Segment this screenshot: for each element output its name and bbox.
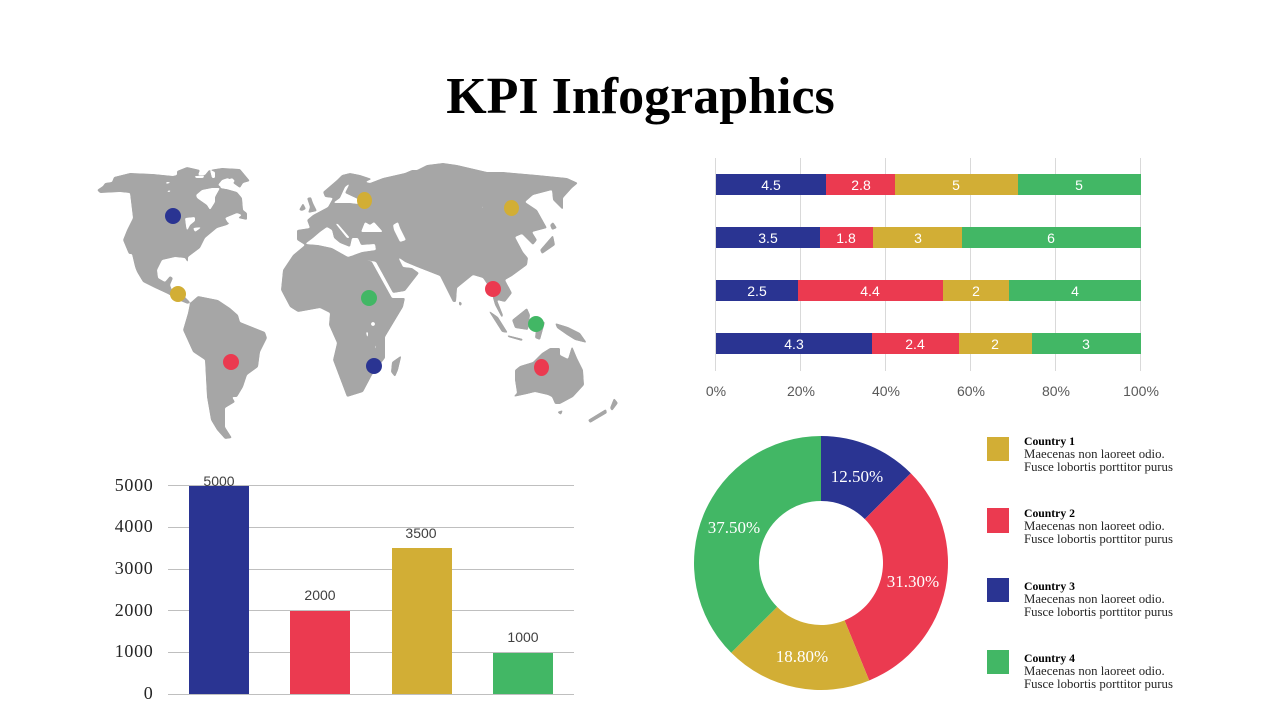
world map with markers <box>97 163 618 439</box>
legend item: Country 4 <box>987 650 1173 691</box>
marker: Siberia <box>504 200 519 216</box>
column chart <box>115 473 574 703</box>
stacked bar row 1: 4.5 <box>761 177 781 193</box>
stacked bar row 2: 3 <box>914 230 922 246</box>
donut percentage labels: 18.80% <box>776 647 828 666</box>
stacked bar row 2: 3.5 <box>758 230 778 246</box>
legend item: Country 2: Country 2 <box>1024 507 1075 520</box>
donut percentage labels <box>708 467 939 666</box>
donut segment: 37.5% <box>694 436 821 653</box>
marker: Southern Africa <box>366 358 382 374</box>
donut chart <box>694 436 948 690</box>
legend item: Country 2: Fusce lobortis porttitor purus <box>1024 532 1173 546</box>
column value labels: 1000 <box>507 629 539 645</box>
stacked bar row 3: 4.4 <box>860 283 880 299</box>
stacked bar row 1: 2.8 <box>851 177 871 193</box>
legend item: Country 1 <box>987 435 1173 474</box>
column value labels: 5000 <box>203 473 235 489</box>
percent axis labels: 0% <box>706 383 726 399</box>
marker: Central America <box>170 286 186 302</box>
legend item: Country 1: Fusce lobortis porttitor purus <box>1024 460 1173 474</box>
column: 3500 <box>392 548 452 694</box>
stacked bar row 1 <box>716 174 1141 195</box>
stacked bar row 3 <box>716 280 1141 301</box>
percent axis labels: 60% <box>957 383 985 399</box>
stacked bar row 4 <box>716 333 1141 354</box>
percent axis labels <box>706 383 1159 399</box>
column: 1000 <box>493 653 553 694</box>
column: 5000 <box>189 486 249 694</box>
marker: Australia <box>534 359 549 376</box>
stacked bar chart <box>706 158 1159 399</box>
marker: Africa <box>361 290 377 306</box>
column value labels: 2000 <box>304 587 336 603</box>
donut segment: 12.5% <box>821 436 911 519</box>
stacked bar row 3: 2 <box>972 283 980 299</box>
stacked bar row 1: 5 <box>1075 177 1083 193</box>
percent axis labels: 100% <box>1123 383 1159 399</box>
y axis labels: 3000 <box>115 558 154 578</box>
y axis labels: 5000 <box>115 475 154 495</box>
legend item: Country 1: Maecenas non laoreet odio. <box>1024 447 1165 461</box>
stacked bar row 4: 3 <box>1082 336 1090 352</box>
percent axis labels: 20% <box>787 383 815 399</box>
map land masses <box>97 163 618 439</box>
donut percentage labels: 12.50% <box>831 467 883 486</box>
legend item: Country 2: Maecenas non laoreet odio. <box>1024 519 1165 533</box>
column value labels: 3500 <box>405 525 437 541</box>
legend <box>987 435 1173 691</box>
stacked bar row 4: 4.3 <box>784 336 804 352</box>
legend item: Country 1: Country 1 <box>1024 435 1075 448</box>
title: KPI Infographics <box>446 68 835 125</box>
y axis labels: 1000 <box>115 641 154 661</box>
stacked bar row 3: 4 <box>1071 283 1079 299</box>
stacked bar row 3: 2.5 <box>747 283 767 299</box>
donut percentage labels: 37.50% <box>708 518 760 537</box>
stacked bar row 2 <box>716 227 1141 248</box>
y axis labels <box>115 475 154 703</box>
marker: Indonesia <box>528 316 544 332</box>
legend item: Country 4: Country 4 <box>1024 652 1075 665</box>
legend item: Country 2 <box>987 507 1173 546</box>
donut segment: 18.8% <box>731 607 869 690</box>
legend item: Country 4: Maecenas non laoreet odio. <box>1024 664 1165 678</box>
stacked bar row 1: 5 <box>952 177 960 193</box>
marker: Southeast Asia <box>485 281 501 297</box>
percent axis labels: 80% <box>1042 383 1070 399</box>
legend item: Country 4: Fusce lobortis porttitor purus <box>1024 677 1173 691</box>
percent axis labels: 40% <box>872 383 900 399</box>
column value labels <box>203 473 539 645</box>
stacked bar row 4: 2.4 <box>905 336 925 352</box>
donut segment: 31.3% <box>845 473 948 680</box>
stacked bar row 2: 1.8 <box>836 230 856 246</box>
y axis labels: 2000 <box>115 600 154 620</box>
y axis labels: 0 <box>144 683 154 703</box>
legend item: Country 3: Maecenas non laoreet odio. <box>1024 592 1165 606</box>
y axis labels: 4000 <box>115 516 154 536</box>
stacked bar row 2: 6 <box>1047 230 1055 246</box>
legend item: Country 3 <box>987 578 1173 619</box>
marker: North America <box>165 208 181 224</box>
stacked bar row 4: 2 <box>991 336 999 352</box>
marker: South America <box>223 354 239 370</box>
column: 2000 <box>290 611 350 694</box>
legend item: Country 3: Fusce lobortis porttitor purus <box>1024 605 1173 619</box>
donut percentage labels: 31.30% <box>887 572 939 591</box>
marker: Europe <box>357 192 372 209</box>
legend item: Country 3: Country 3 <box>1024 580 1075 593</box>
